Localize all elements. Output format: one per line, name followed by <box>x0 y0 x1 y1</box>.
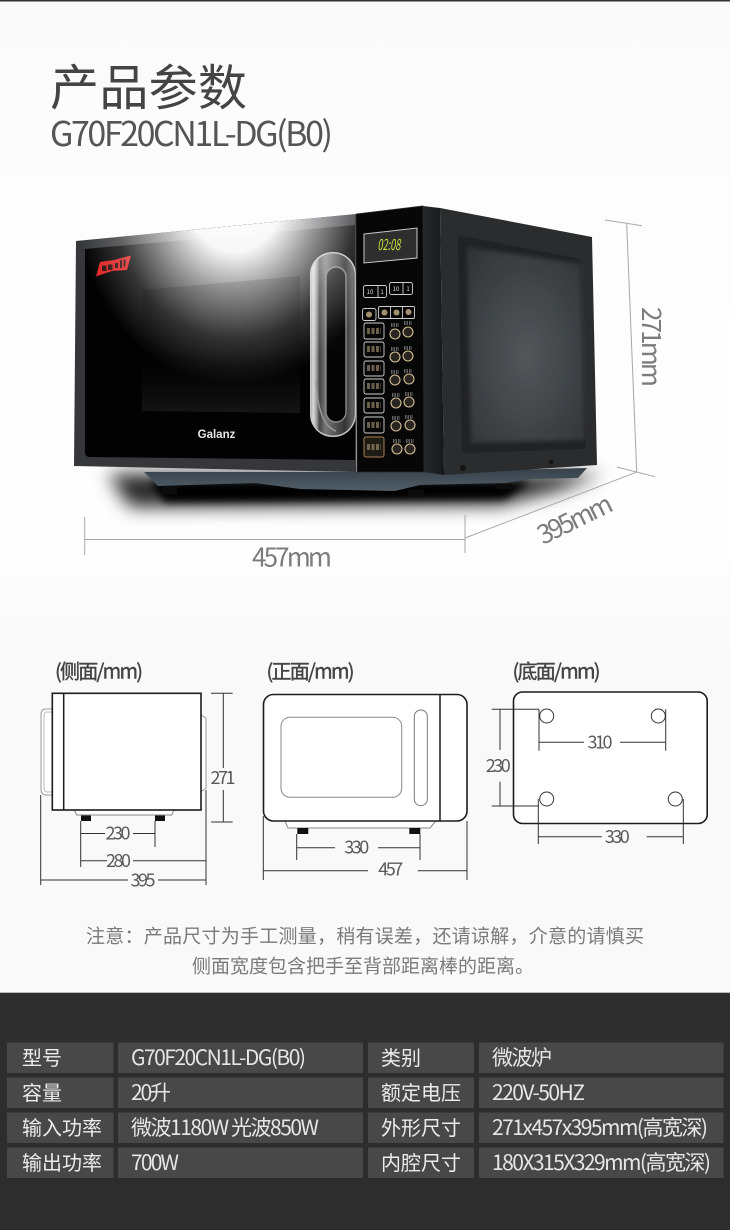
row: output power and cavity size: 700W <box>131 1147 179 1177</box>
row: output power and cavity size: 输出功率 <box>22 1147 102 1176</box>
row: input power and outer size: 271x457x395mm(高宽深) <box>492 1112 708 1142</box>
measurement note: 注意：产品尺寸为手工测量，稍有误差，还请谅解，介意的请慎买 <box>86 922 644 948</box>
time buttons <box>364 282 412 298</box>
row: input power and outer size: 微波1180W 光波850W <box>131 1112 319 1142</box>
black door glass <box>85 225 355 460</box>
microwave product illustration <box>74 206 602 507</box>
row: model and category: 型号 <box>22 1042 62 1071</box>
time buttons: 10 <box>367 287 374 296</box>
right column round buttons <box>390 323 415 454</box>
bottom view dimensions <box>486 709 683 849</box>
heading: side view: (侧面/mm) <box>55 656 143 684</box>
time buttons: 10 <box>393 284 400 293</box>
dimension: height 271mm: 271mm <box>634 307 671 387</box>
row: capacity and voltage <box>7 1077 724 1108</box>
control panel <box>356 206 424 472</box>
row: capacity and voltage: 容量 <box>22 1077 62 1106</box>
light reflection <box>88 214 356 374</box>
side view dimensions: 230 <box>106 820 130 846</box>
row: output power and cavity size: 180X315X329mm(高宽深) <box>492 1147 711 1177</box>
row: input power and outer size: 输入功率 <box>22 1112 102 1141</box>
top edge bar <box>0 0 730 2</box>
bottom view dimensions: 230 <box>486 752 511 778</box>
side view dimensions: 271 <box>210 764 236 790</box>
digital display: 02:08 <box>378 234 402 255</box>
heading: front view: (正面/mm) <box>266 656 354 684</box>
specification panel <box>0 992 730 1230</box>
row: capacity and voltage: 220V-50HZ <box>492 1077 585 1107</box>
measurement note: 侧面宽度包含把手至背部距离棒的距离。 <box>192 952 534 978</box>
heading: bottom view: (底面/mm) <box>512 656 600 684</box>
floor shadow <box>108 474 602 507</box>
dimension: width 457mm <box>85 515 465 574</box>
row: model and category: 微波炉 <box>492 1042 552 1072</box>
dimension: width 457mm: 457mm <box>252 538 332 574</box>
base and feet <box>144 468 587 496</box>
bottom view dimensions: 310 <box>588 728 612 754</box>
row: input power and outer size: 外形尺寸 <box>381 1112 461 1141</box>
side view dimensions: 280 <box>106 847 131 873</box>
row: output power and cavity size <box>7 1147 724 1178</box>
model subtitle: G70F20CN1L-DG(B0) <box>50 107 333 156</box>
front view dimensions: 457 <box>378 856 403 882</box>
time buttons: 1 <box>406 284 410 293</box>
chrome handle <box>311 253 355 436</box>
digital display <box>364 228 417 263</box>
measurement note <box>86 922 644 978</box>
dimension: depth 395mm: 395mm <box>530 484 618 552</box>
dimension: height 271mm <box>605 220 671 477</box>
bottom view outline <box>514 692 707 824</box>
brand name: Galanz <box>198 429 236 441</box>
door frame <box>74 214 356 472</box>
row: capacity and voltage: 20升 <box>131 1077 171 1107</box>
row: capacity and voltage: 额定电压 <box>381 1077 461 1106</box>
side view dimensions: 395 <box>130 866 156 892</box>
front view dimensions <box>263 816 467 882</box>
bottom view diagram <box>486 656 707 849</box>
front view diagram <box>263 656 467 882</box>
front view outline <box>264 694 467 834</box>
row: input power and outer size <box>7 1112 724 1143</box>
red badge <box>96 256 131 276</box>
row: model and category: G70F20CN1L-DG(B0) <box>131 1042 306 1072</box>
row: model and category: 类别 <box>381 1042 421 1071</box>
front corner strip <box>423 206 444 475</box>
side view diagram <box>41 656 236 892</box>
row: model and category <box>7 1042 724 1073</box>
function buttons row <box>362 306 414 320</box>
front view dimensions: 330 <box>344 834 369 860</box>
side view outline <box>41 693 206 821</box>
left column buttons <box>364 323 384 457</box>
time buttons: 1 <box>380 287 384 296</box>
side panel <box>440 208 597 475</box>
row: output power and cavity size: 内腔尺寸 <box>381 1147 461 1176</box>
oven window <box>142 276 300 413</box>
title: 产品参数 <box>50 49 247 120</box>
bottom view dimensions: 330 <box>605 823 630 849</box>
dimension: depth 395mm <box>465 472 637 552</box>
side view dimensions <box>41 693 236 892</box>
